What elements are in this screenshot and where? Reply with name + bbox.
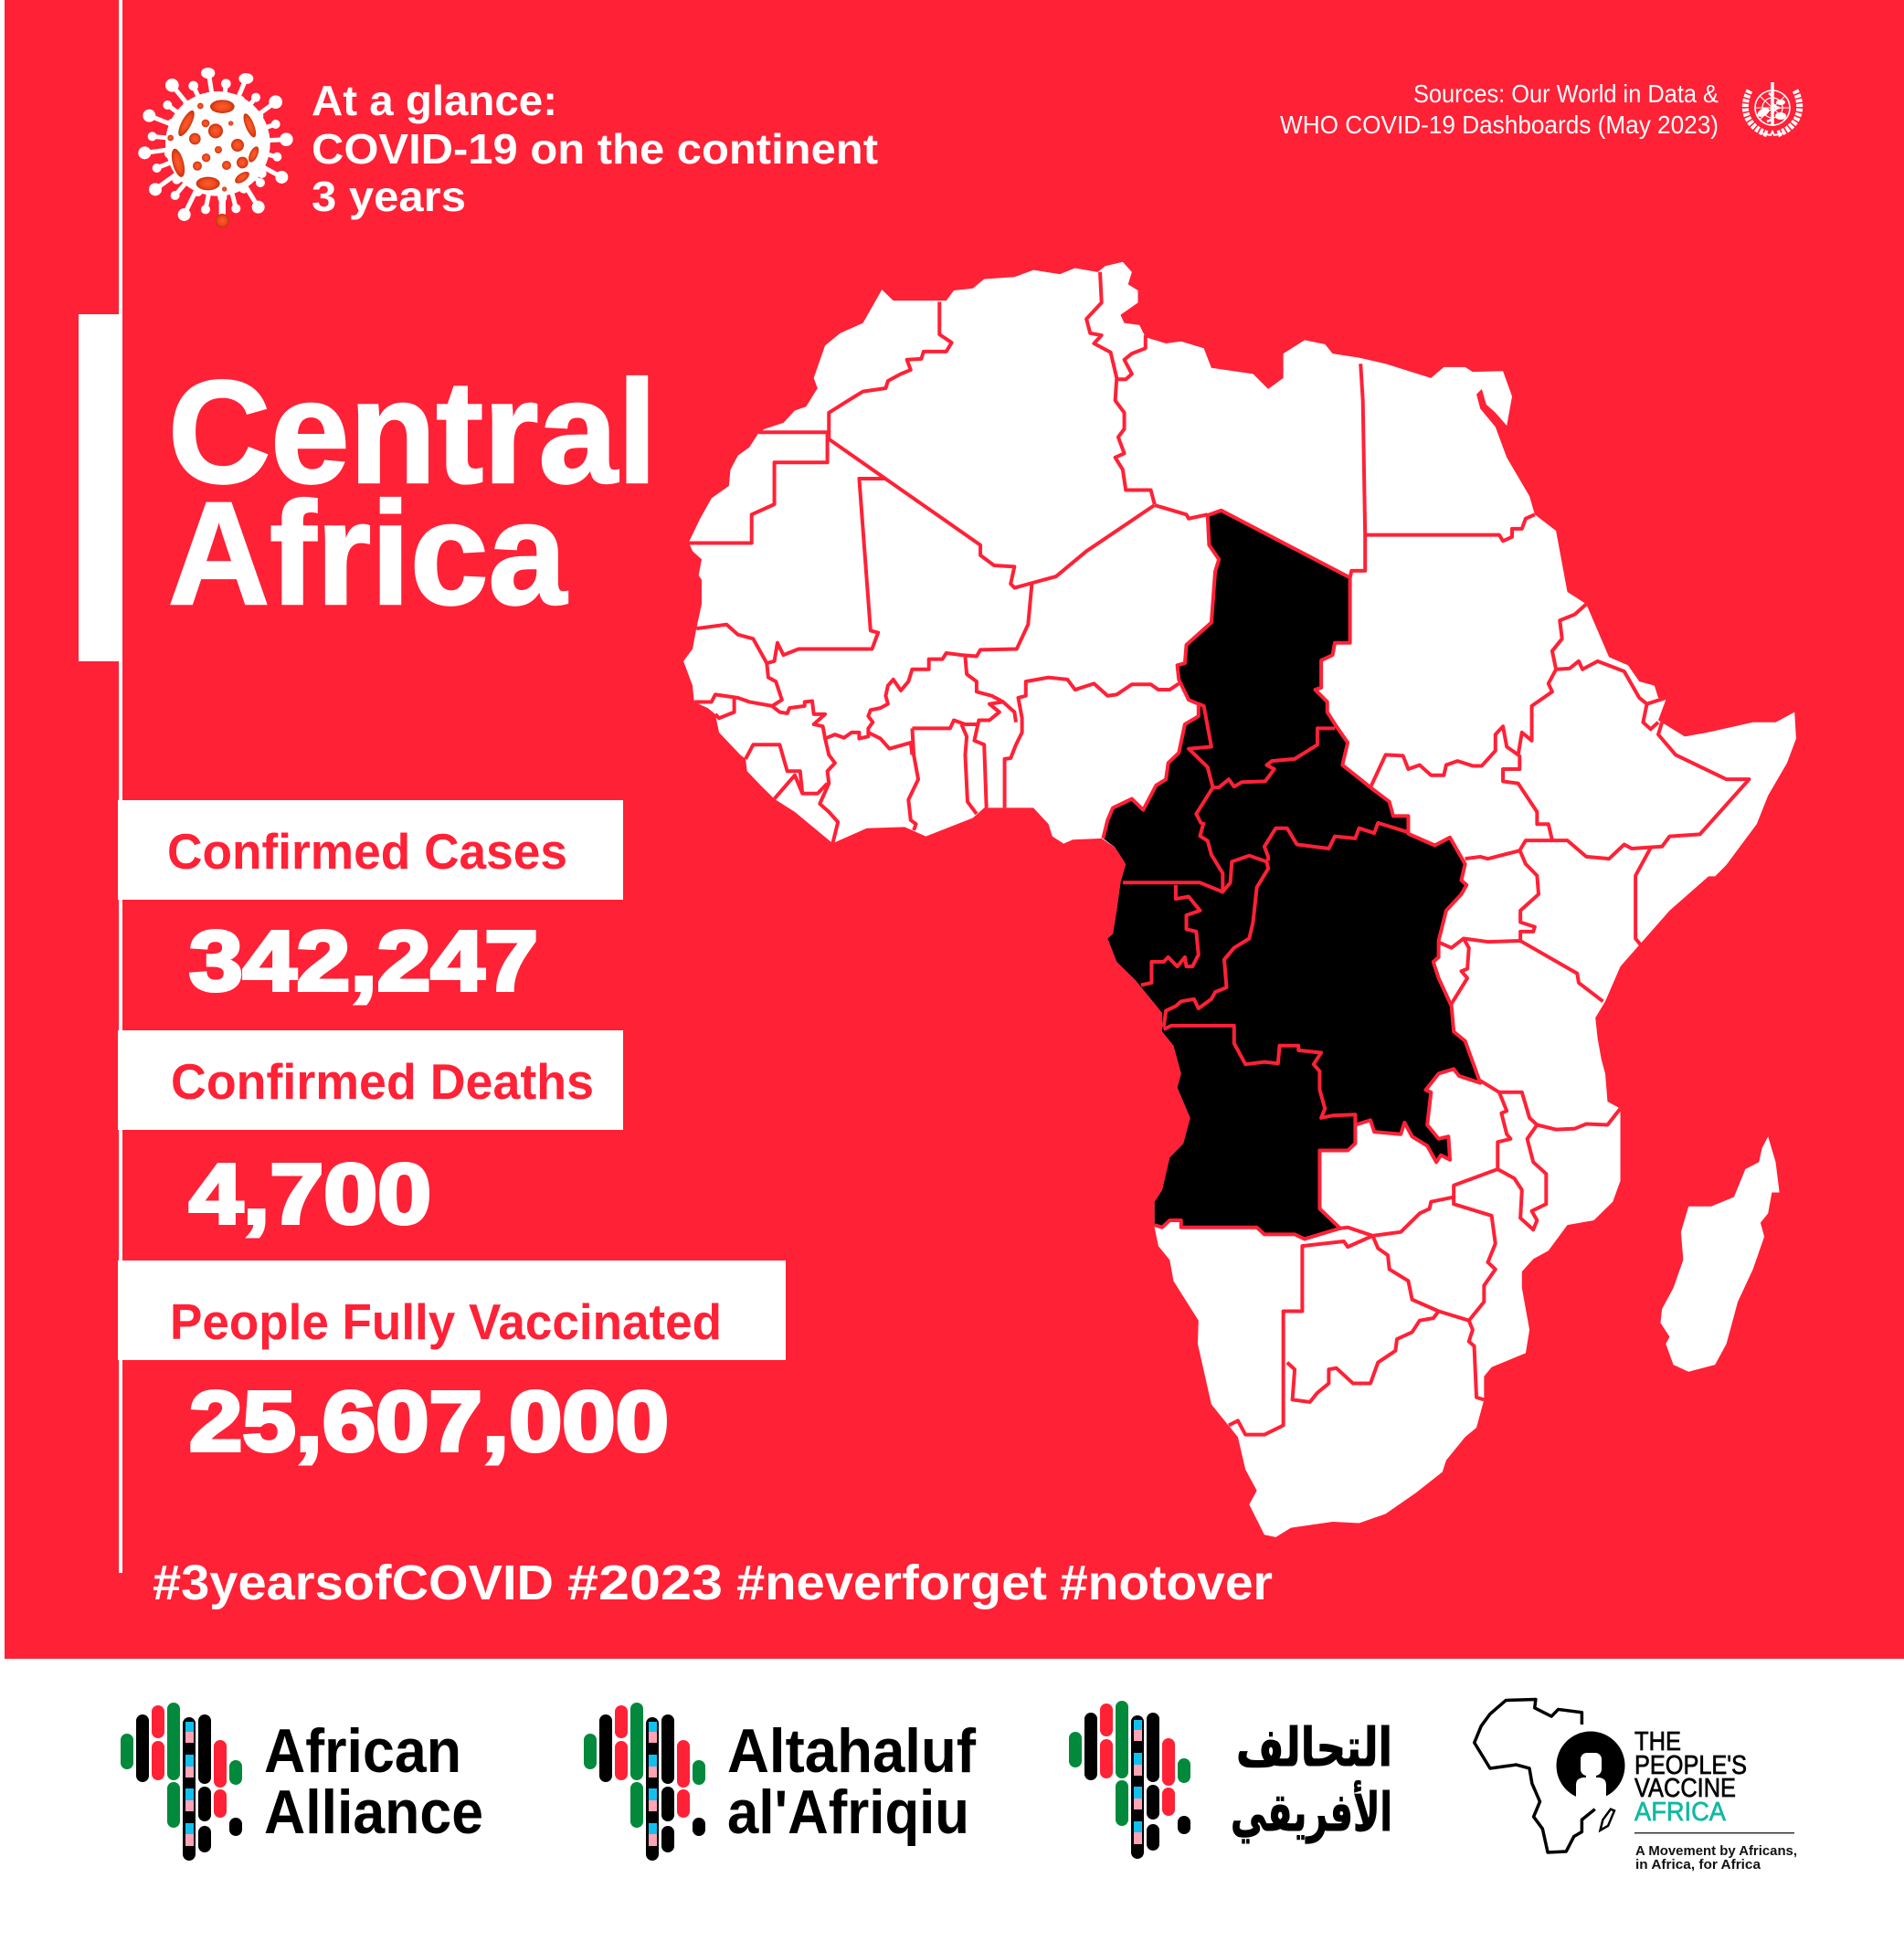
logo: African Alliance: Alliance bbox=[264, 1777, 483, 1847]
title: Central Africa: Africa bbox=[168, 471, 567, 635]
text: The People's Vaccine Africa bbox=[1634, 1727, 1747, 1827]
tagline: in Africa, for Africa bbox=[1635, 1857, 1761, 1872]
text: The People's Vaccine Africa: VACCINE bbox=[1634, 1774, 1736, 1803]
stat: people fully vaccinated bbox=[118, 1261, 786, 1469]
stat: confirmed deaths bbox=[118, 1030, 623, 1241]
logo: Altahaluf al'Afriqiu: Altahaluf bbox=[727, 1716, 976, 1786]
hashtags: #2023 bbox=[567, 1556, 723, 1610]
logo: African Alliance bbox=[121, 1703, 483, 1861]
hashtags bbox=[153, 1556, 1273, 1610]
map: northern borders bbox=[689, 272, 1749, 860]
icon: Africa outline bbox=[1475, 1700, 1595, 1852]
sources text bbox=[1280, 79, 1719, 139]
hashtags: #3yearsofCOVID bbox=[153, 1556, 554, 1610]
title: Central Africa bbox=[168, 350, 657, 635]
text: The People's Vaccine Africa: PEOPLE'S bbox=[1634, 1751, 1747, 1780]
text: The People's Vaccine Africa: AFRICA bbox=[1634, 1798, 1727, 1827]
text: The People's Vaccine Africa: THE bbox=[1634, 1727, 1681, 1756]
logo: African Alliance: African bbox=[264, 1716, 461, 1786]
map: southern Africa fill bbox=[1107, 822, 1757, 1537]
logo: Altahaluf al'Afriqiu: al'Afriqiu bbox=[727, 1777, 969, 1847]
header text: 3 years bbox=[312, 173, 466, 220]
title: Central Africa: Central bbox=[168, 350, 657, 513]
stat: people fully vaccinated: People Fully Vaccinated bbox=[170, 1293, 722, 1350]
header text: At a glance: bbox=[312, 77, 557, 124]
sources text: Sources: Our World in Data & bbox=[1413, 79, 1719, 108]
map: southern borders bbox=[1123, 822, 1651, 1435]
stat: confirmed cases: 342,247 bbox=[189, 913, 538, 1008]
stat: people fully vaccinated: 25,607,000 bbox=[189, 1374, 669, 1469]
icon: person in circle bbox=[1557, 1732, 1624, 1801]
map: Africa with Central Africa highlighted bbox=[683, 262, 1796, 1537]
tagline: A Movement by Africans, bbox=[1635, 1843, 1797, 1859]
vertical white rule bbox=[119, 0, 122, 1573]
map: Madagascar bbox=[1660, 1136, 1780, 1372]
sources text: WHO COVID-19 Dashboards (May 2023) bbox=[1280, 111, 1719, 139]
hashtags: #neverforget bbox=[736, 1556, 1047, 1610]
logo: The People's Vaccine Africa bbox=[1475, 1700, 1797, 1872]
logo: Arabic African Alliance: التحالف bbox=[1236, 1718, 1392, 1777]
icon: Madagascar outline bbox=[1600, 1809, 1614, 1830]
stat: confirmed cases bbox=[118, 800, 623, 1008]
stat: confirmed deaths: Confirmed Deaths bbox=[171, 1053, 594, 1110]
white title accent bar bbox=[79, 314, 120, 661]
map: northern Africa fill bbox=[683, 262, 1796, 876]
stat: confirmed cases: Confirmed Cases bbox=[167, 823, 567, 880]
logo: Altahaluf al'Afriqiu bbox=[584, 1703, 976, 1861]
hashtags: #notover bbox=[1060, 1556, 1273, 1610]
icon: WHO emblem bbox=[1745, 82, 1800, 135]
logo: Arabic African Alliance bbox=[1069, 1701, 1392, 1859]
stat: confirmed deaths: 4,700 bbox=[189, 1146, 431, 1241]
icon: coronavirus bbox=[138, 68, 293, 227]
tagline bbox=[1635, 1843, 1797, 1872]
header text bbox=[312, 77, 878, 220]
logo: Arabic African Alliance: الأفريقي bbox=[1231, 1780, 1392, 1844]
header text: COVID-19 on the continent bbox=[312, 125, 878, 173]
